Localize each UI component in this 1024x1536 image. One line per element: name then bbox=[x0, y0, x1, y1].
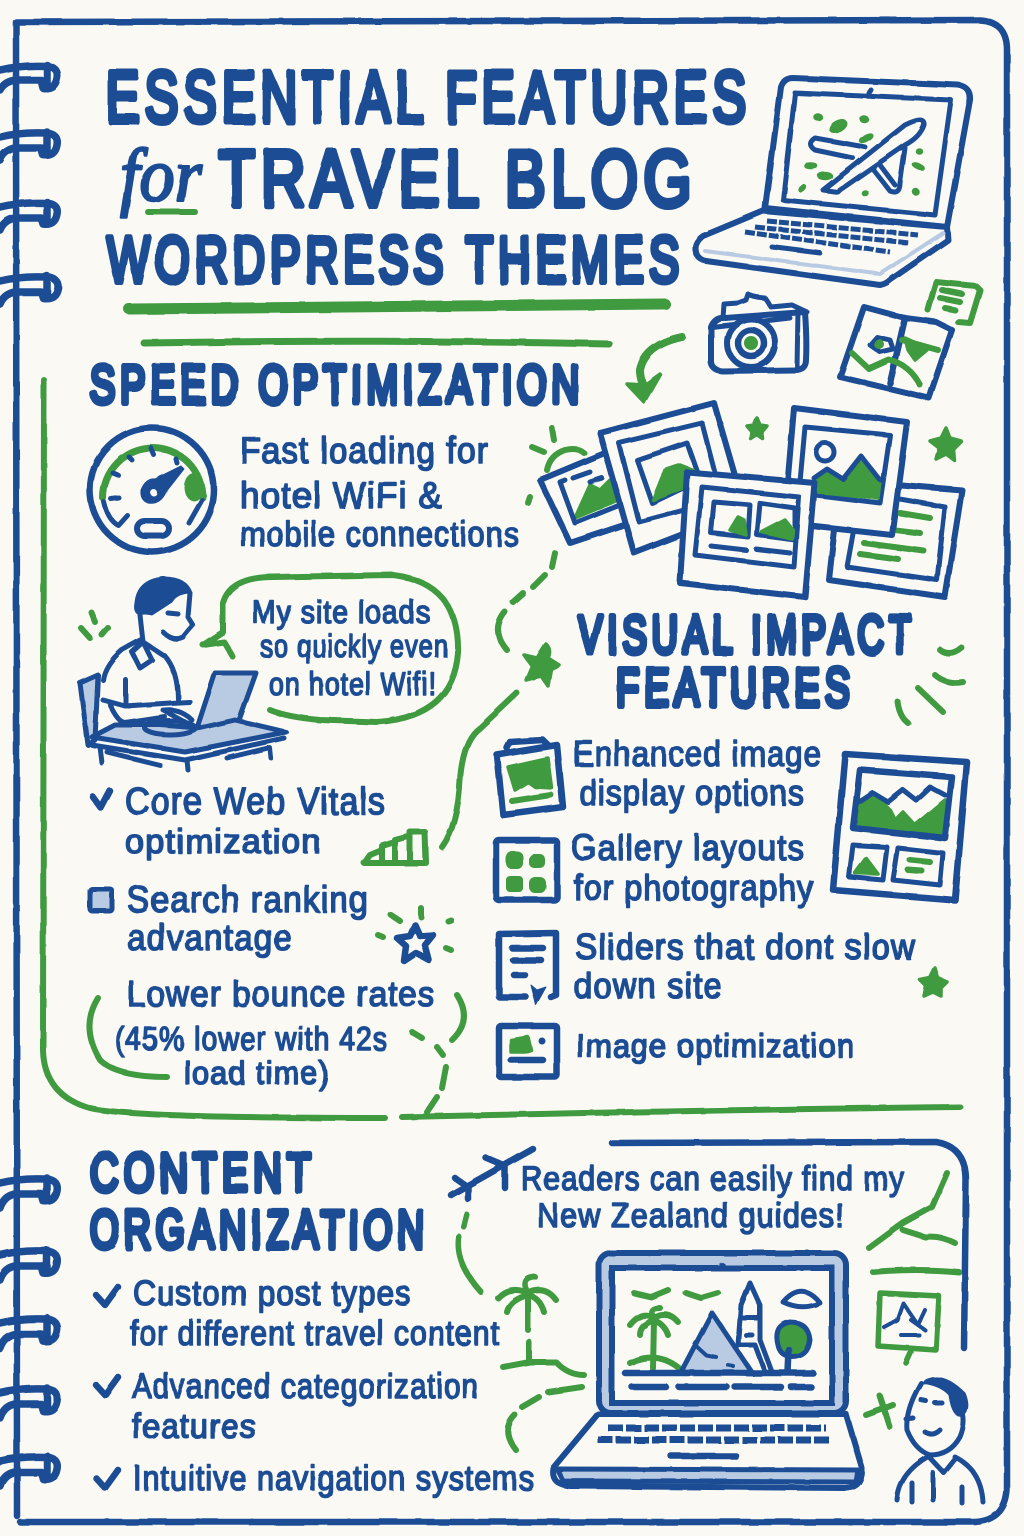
icon: speedometer bbox=[90, 428, 214, 552]
feature: enhanced image: Enhanced image bbox=[573, 733, 822, 774]
icon: laptop with plane bbox=[695, 78, 970, 285]
green dashed flight path bbox=[458, 1215, 481, 1292]
illustration: man smiling bbox=[897, 1377, 983, 1503]
spiral binding top bbox=[0, 65, 58, 304]
quote: readers: New Zealand guides! bbox=[537, 1197, 845, 1235]
feature: gallery layouts bbox=[496, 827, 814, 908]
green sparks right bbox=[898, 648, 963, 723]
speech bubble: hotel wifi: My site loads bbox=[252, 594, 431, 630]
feature: enhanced image bbox=[497, 733, 822, 815]
list item: custom post types: Custom post types bbox=[133, 1274, 412, 1313]
photo centre bbox=[680, 472, 815, 597]
list item: custom post types: for different travel content bbox=[130, 1314, 500, 1353]
icon: airplane bbox=[451, 1149, 533, 1199]
text: lower bounce rates: (45% lower with 42s bbox=[115, 1020, 388, 1057]
heading: visual impact features bbox=[578, 605, 916, 718]
list item: intuitive navigation: Intuitive navigation systems bbox=[133, 1459, 535, 1498]
title: for bbox=[120, 134, 202, 218]
heading: speed optimization: SPEED OPTIMIZATION bbox=[90, 355, 584, 415]
text: fast loading: hotel WiFi & bbox=[240, 475, 443, 516]
icon: slider document bbox=[499, 933, 556, 1005]
list item: core web vitals bbox=[93, 781, 386, 861]
quote: readers bbox=[521, 1160, 905, 1235]
icon: palm and island bbox=[498, 1277, 584, 1450]
list item: core web vitals: optimization bbox=[125, 823, 322, 861]
icon: image stack bbox=[497, 740, 563, 815]
icon: map sign bbox=[878, 1293, 939, 1363]
photo 2 bbox=[600, 403, 745, 553]
feature: sliders bbox=[499, 926, 916, 1006]
icon: green bar chart bbox=[364, 832, 426, 863]
feature: image optimization bbox=[499, 1026, 855, 1077]
icon: grid gallery bbox=[496, 840, 557, 900]
icon: plane on laptop screen bbox=[810, 120, 924, 192]
green divider right bbox=[402, 1107, 960, 1117]
green sparks bbox=[81, 612, 108, 638]
text: fast loading: mobile connections bbox=[240, 515, 520, 554]
green section bracket line bbox=[43, 380, 385, 1118]
feature: gallery layouts: for photography bbox=[574, 867, 814, 908]
photo 4 back bbox=[829, 480, 962, 597]
illustration: framed layout bbox=[833, 754, 967, 900]
quote: readers: Readers can easily find my bbox=[521, 1160, 905, 1198]
title underlines bbox=[129, 304, 665, 344]
list item: core web vitals: Core Web Vitals bbox=[125, 781, 386, 823]
illustration: person at laptop bbox=[80, 577, 286, 770]
speech bubble: hotel wifi: on hotel Wifi! bbox=[269, 666, 437, 702]
icon: star with sparks bbox=[378, 908, 451, 961]
illustration: laptop with destinations bbox=[553, 1253, 862, 1488]
screen scene bbox=[625, 1283, 820, 1387]
icon: green star bbox=[920, 968, 947, 996]
icon: image card bbox=[499, 1026, 557, 1077]
text: lower bounce rates: Lower bounce rates bbox=[127, 973, 435, 1014]
title: ESSENTIAL FEATURES bbox=[106, 58, 751, 138]
green stars bbox=[747, 418, 961, 460]
list item: advanced categorization: features bbox=[132, 1407, 257, 1446]
list item: advanced categorization bbox=[96, 1367, 479, 1446]
title bbox=[106, 58, 751, 296]
arrow: curved green arrow to gallery bbox=[627, 337, 682, 402]
title: WORDPRESS THEMES bbox=[107, 223, 684, 296]
feature: enhanced image: display options bbox=[579, 772, 805, 813]
icon: gallery photos bbox=[528, 403, 962, 597]
title: TRAVEL BLOG bbox=[218, 134, 697, 223]
text: fast loading: Fast loading for bbox=[240, 430, 489, 471]
heading: content organization: ORGANIZATION bbox=[90, 1200, 429, 1260]
text: lower bounce rates bbox=[89, 973, 464, 1091]
green dashed route with star bbox=[442, 553, 559, 847]
list item: advanced categorization: Advanced categorization bbox=[132, 1367, 479, 1406]
navy callout bracket bbox=[612, 1142, 966, 1348]
speech bubble: hotel wifi bbox=[203, 575, 458, 722]
photo 3 bbox=[784, 408, 907, 535]
icon: folded map bbox=[840, 307, 952, 398]
feature: sliders: Sliders that dont slow bbox=[575, 926, 916, 967]
photo 1 bbox=[540, 450, 630, 543]
heading: visual impact features: FEATURES bbox=[616, 658, 855, 718]
heading: content organization bbox=[90, 1143, 429, 1260]
green sparks near gallery bbox=[528, 428, 584, 503]
list item: search ranking bbox=[90, 879, 369, 958]
list item: search ranking: Search ranking bbox=[127, 879, 369, 920]
list item: search ranking: advantage bbox=[127, 917, 293, 958]
feature: image optimization: Image optimization bbox=[576, 1027, 855, 1064]
heading: content organization: CONTENT bbox=[90, 1143, 316, 1203]
green flecks bbox=[799, 115, 923, 194]
feature: sliders: down site bbox=[574, 965, 723, 1006]
spiral binding bottom bbox=[0, 1178, 57, 1486]
icon: green plus bbox=[866, 1396, 893, 1427]
text: lower bounce rates: load time) bbox=[184, 1055, 330, 1091]
icon: camera bbox=[711, 294, 807, 371]
list item: custom post types bbox=[96, 1274, 500, 1353]
speech bubble: hotel wifi: so quickly even bbox=[260, 628, 449, 664]
feature: gallery layouts: Gallery layouts bbox=[571, 827, 805, 868]
icon: green route map bbox=[869, 1173, 959, 1272]
dashed green path to lower line bbox=[412, 1032, 446, 1112]
text: fast loading bbox=[240, 430, 520, 554]
icon: green note bbox=[928, 282, 980, 323]
